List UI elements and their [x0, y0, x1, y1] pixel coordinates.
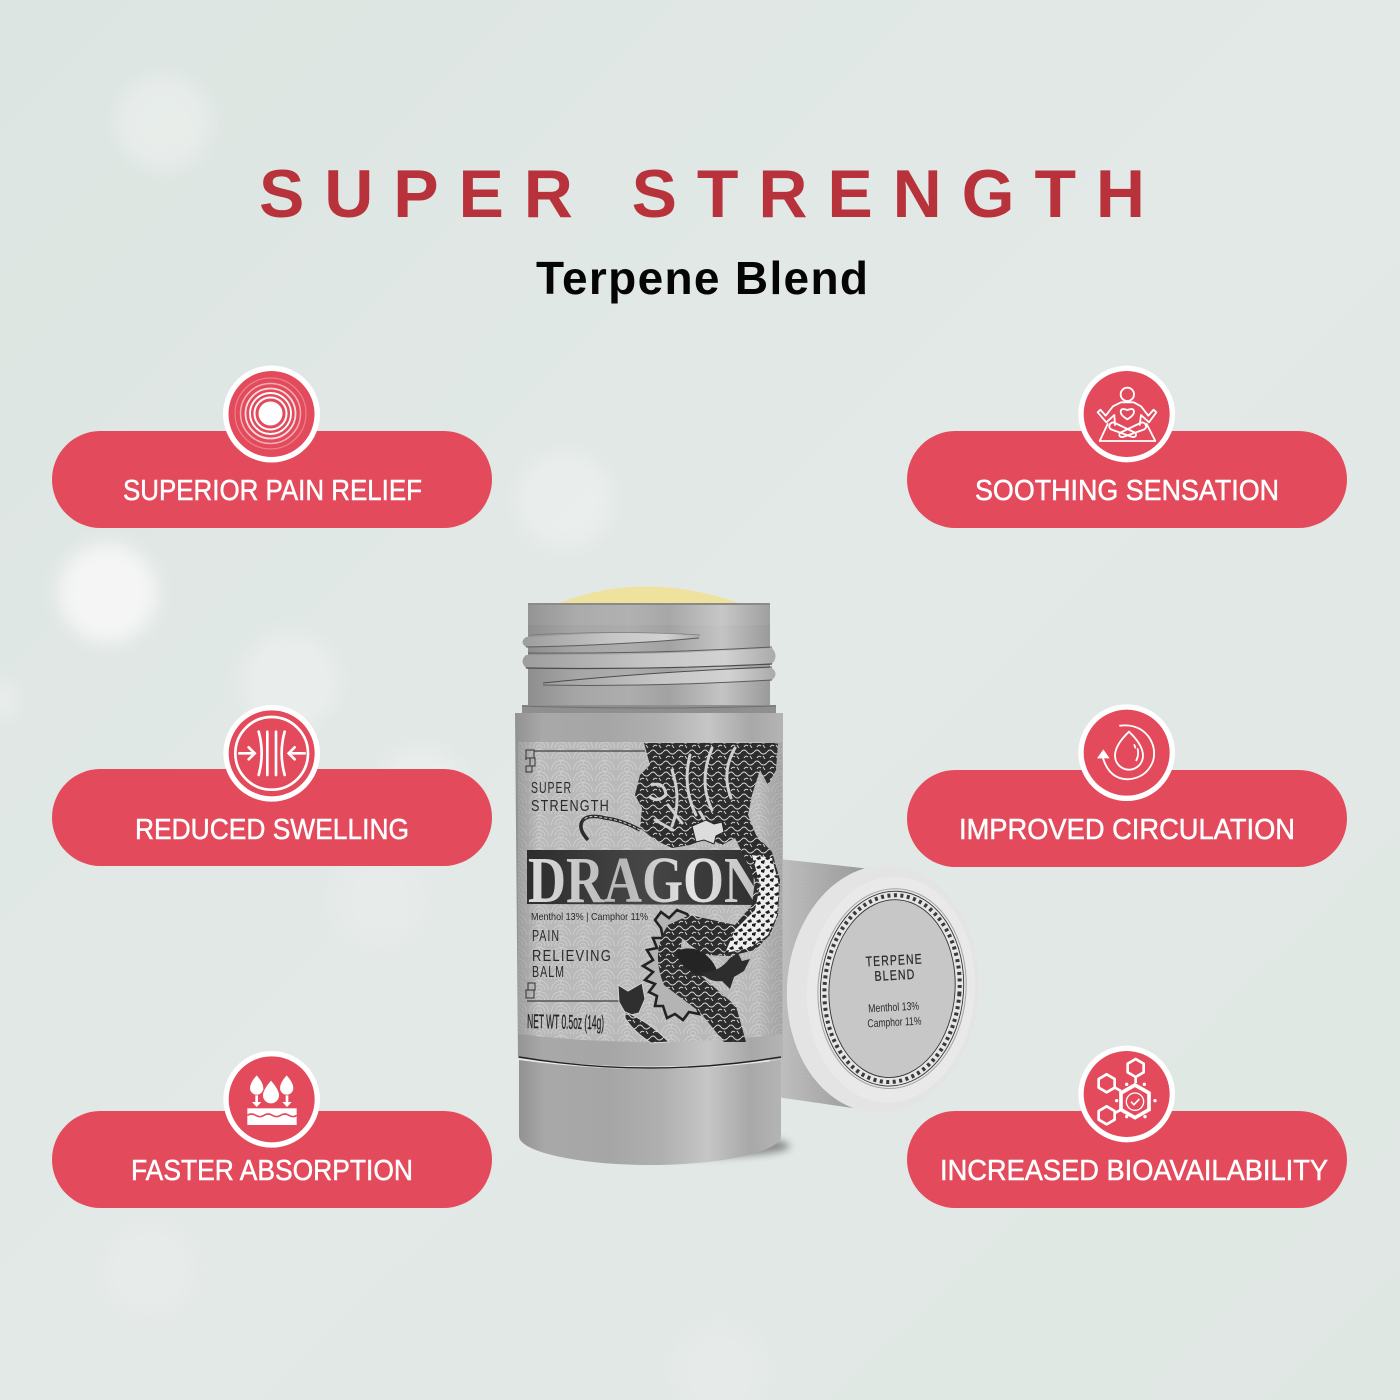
icon: swelling arrows	[223, 705, 320, 802]
label text: super strength: STRENGTH	[531, 798, 610, 815]
product type: PAIN	[532, 928, 560, 945]
benefit: reduced swelling	[52, 705, 492, 866]
cap lying behind the stick	[770, 858, 987, 1119]
cap label text: TERPENE	[865, 950, 923, 969]
benefit: increased bioavailability	[907, 1046, 1347, 1208]
pill label: REDUCED SWELLING	[135, 814, 409, 846]
pill	[907, 1111, 1347, 1208]
product type	[532, 928, 612, 981]
product type: BALM	[532, 964, 565, 981]
dragon mane	[643, 910, 699, 1020]
pill label: INCREASED BIOAVAILABILITY	[940, 1155, 1328, 1187]
top knot ornament	[526, 750, 535, 772]
stick product	[515, 586, 790, 1165]
subtitle: Terpene Blend	[536, 252, 868, 304]
icon: concentric rings	[223, 366, 320, 462]
icon: circulation drop	[1078, 704, 1175, 801]
product type: RELIEVING	[532, 948, 612, 965]
brand name: DRAGON	[528, 844, 762, 917]
benefit: soothing sensation	[907, 366, 1347, 528]
dragon foot right	[700, 953, 750, 989]
actives line: Menthol 13% | Camphor 11%	[531, 911, 648, 923]
dragon head and feathers	[650, 748, 735, 830]
pill	[52, 431, 492, 528]
label: NET WT 0.5oz (14g)	[527, 1011, 604, 1034]
pill label: SOOTHING SENSATION	[975, 475, 1279, 507]
cap label text	[864, 950, 926, 1030]
dragon lower body	[658, 925, 746, 1042]
cap label text: Camphor 11%	[867, 1016, 922, 1030]
ground shadow	[610, 1135, 790, 1157]
benefit: faster absorption	[52, 1051, 492, 1208]
balm dome	[559, 586, 739, 603]
neck	[522, 603, 776, 713]
benefit: superior pain relief	[52, 366, 492, 528]
brand band	[527, 850, 764, 905]
pill	[907, 431, 1347, 528]
cap label text: BLEND	[874, 966, 916, 984]
label	[518, 742, 782, 1043]
dragon upper mass	[635, 743, 780, 956]
dragon belly dark	[676, 948, 718, 977]
icon: drops into skin	[223, 1051, 320, 1148]
leaf sprig	[618, 983, 669, 1043]
pill	[52, 769, 492, 866]
pill	[907, 770, 1347, 867]
title: SUPER STRENGTH	[259, 156, 1145, 232]
dragon illustration	[581, 743, 780, 1043]
benefit: improved circulation	[907, 704, 1347, 867]
cap side wall	[770, 858, 880, 1112]
body shell	[515, 713, 783, 1066]
base section	[519, 1060, 781, 1165]
thread bottom	[543, 668, 776, 685]
icon: molecules with check	[1078, 1046, 1175, 1142]
dragon paw	[692, 820, 724, 844]
pill	[52, 1111, 492, 1208]
cap face	[779, 859, 987, 1119]
icon: meditating person	[1078, 366, 1175, 462]
bottom knot ornament	[526, 983, 535, 998]
thread middle	[522, 648, 776, 668]
cap label text: Menthol 13%	[868, 1001, 919, 1015]
pill label: SUPERIOR PAIN RELIEF	[123, 475, 422, 507]
whisker tail	[581, 816, 640, 840]
label text: super strength	[531, 780, 610, 815]
thread top	[522, 633, 700, 647]
dragon white scaled body	[725, 855, 779, 953]
label text: super strength: SUPER	[531, 780, 572, 797]
label frame line	[526, 751, 645, 1001]
pill label: FASTER ABSORPTION	[131, 1155, 413, 1187]
pill label: IMPROVED CIRCULATION	[959, 814, 1295, 846]
